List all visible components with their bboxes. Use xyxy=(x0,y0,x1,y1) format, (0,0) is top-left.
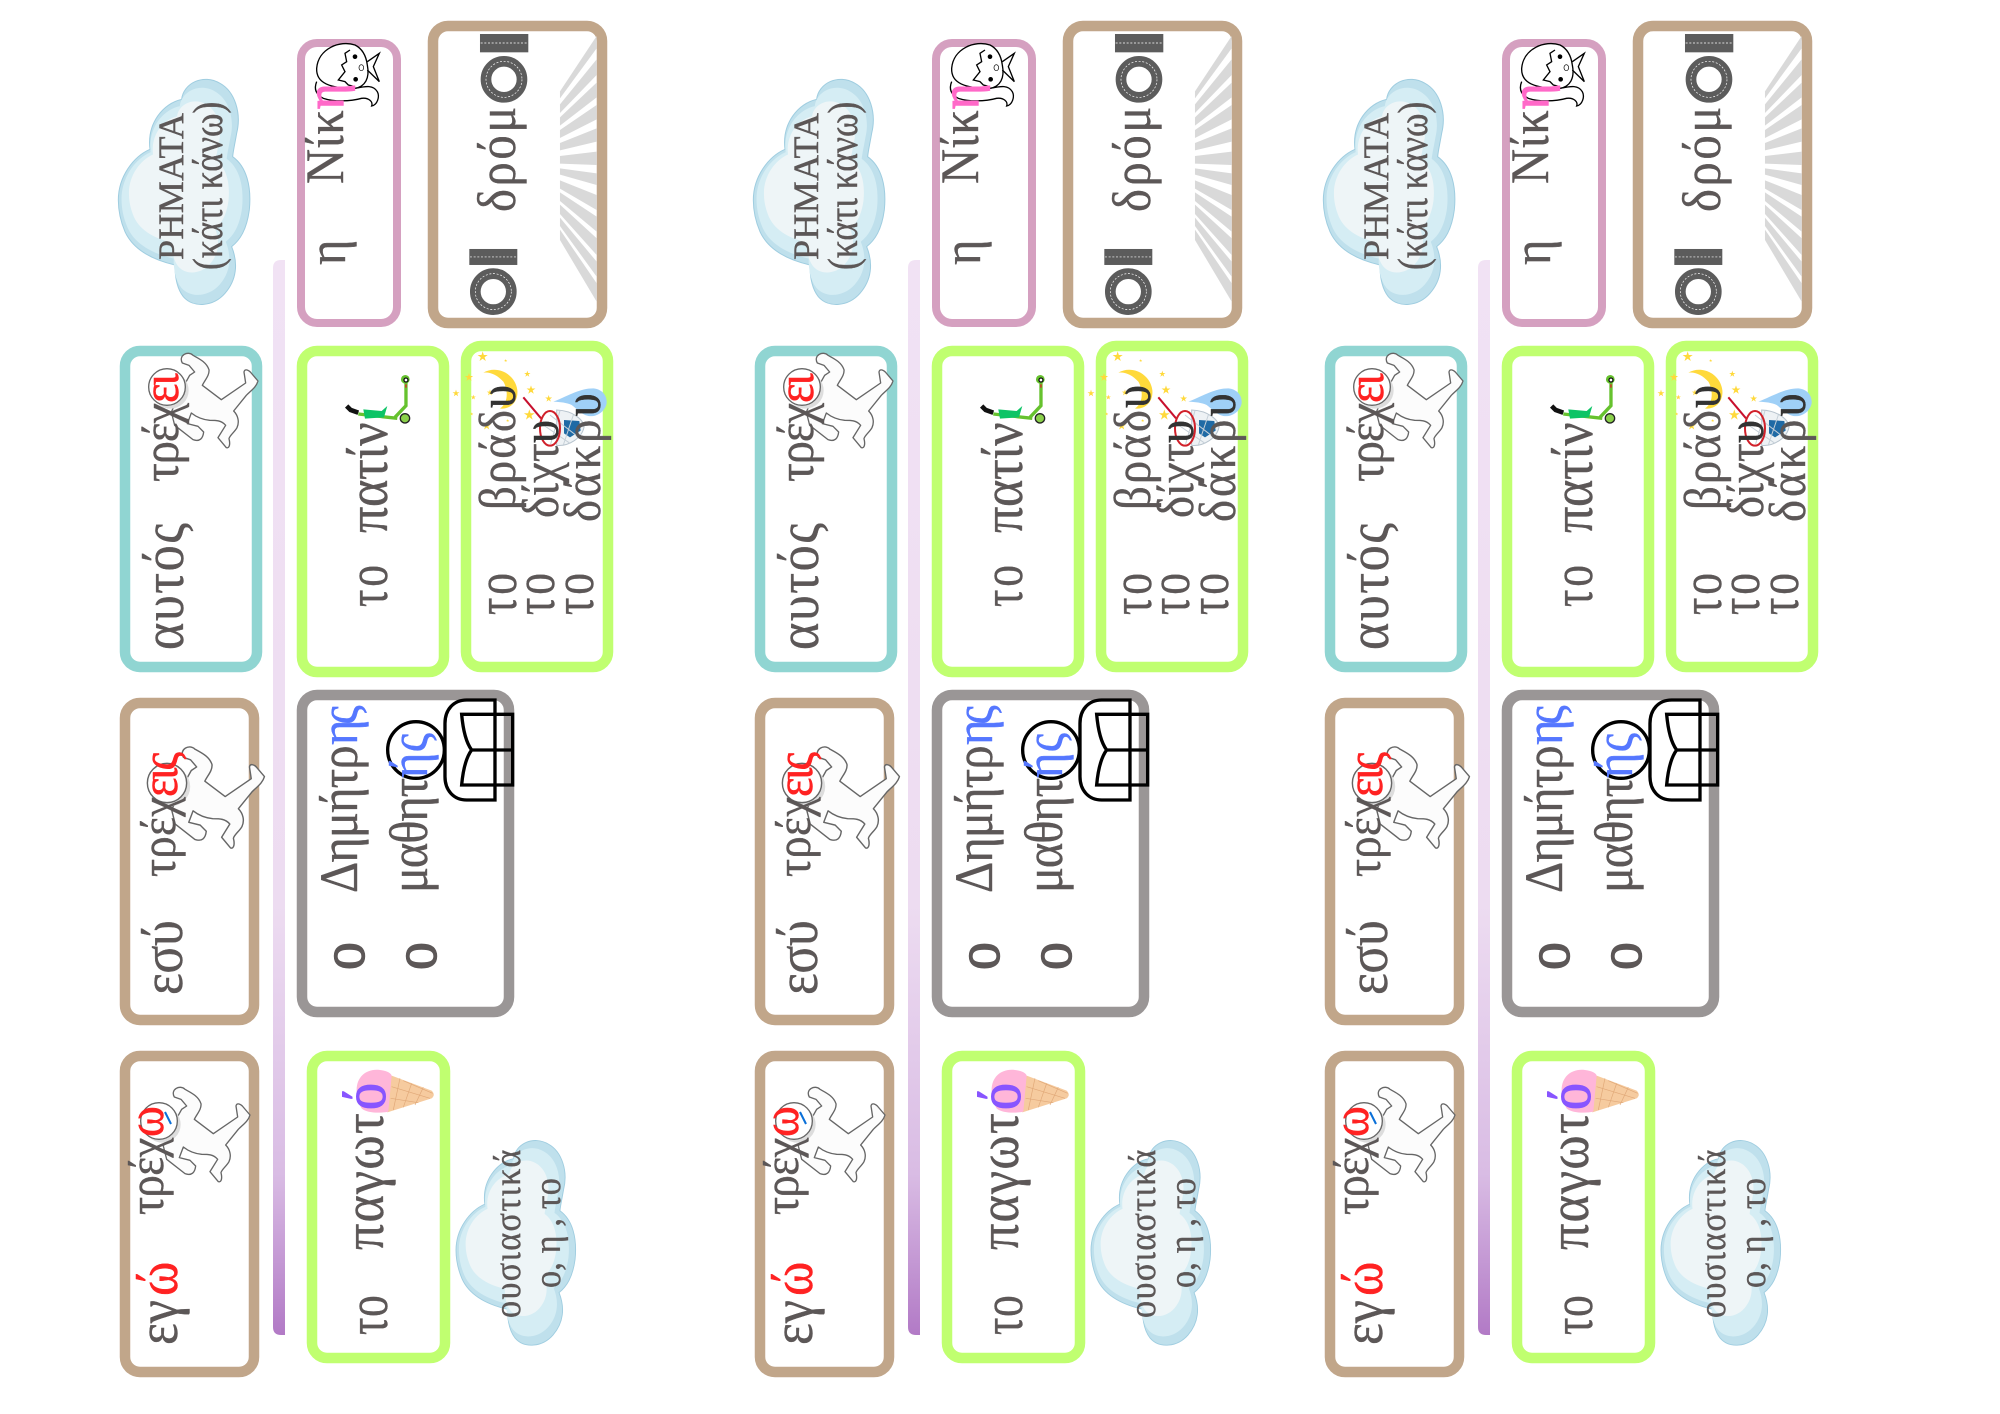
card: η Νίκη: η xyxy=(931,84,991,109)
card: αυτός τρέχει: ει xyxy=(132,373,190,403)
card: το βράδυ, το δίχτυ, το δάκρυ: βράδυ xyxy=(469,385,527,510)
card: το πατίνι: το xyxy=(1541,565,1606,607)
card: αυτός τρέχει: αυτός xyxy=(1336,523,1401,650)
cloud: ουσιαστικά xyxy=(456,1140,576,1345)
card: εσύ τρέχεις xyxy=(125,703,264,1020)
cloud: ουσιαστικά xyxy=(1091,1140,1211,1345)
card: ο Δημήτρης, ο μαθητής: μαθητ xyxy=(1585,778,1645,893)
card: οι δρόμοι xyxy=(433,26,602,323)
card: το βράδυ, το δίχτυ, το δάκρυ: βράδυ xyxy=(1674,385,1732,510)
card: αυτός τρέχει xyxy=(760,351,893,667)
card: ο Δημήτρης, ο μαθητής: Δημήτρ xyxy=(310,745,370,893)
card: το παγωτό: το xyxy=(971,1295,1036,1335)
card: ο Δημήτρης, ο μαθητής: ο xyxy=(1513,942,1583,970)
card: οι δρόμοι xyxy=(1638,26,1807,323)
cloud: ΡΗΜΑΤΑ heading: ΡΗΜΑΤΑ xyxy=(151,113,191,260)
card: εγώ τρέχω: ω xyxy=(752,1106,810,1137)
card: το βράδυ, το δίχτυ, το δάκρυ xyxy=(1658,346,1817,667)
card: το πατίνι: το xyxy=(971,565,1036,607)
card: ο Δημήτρης, ο μαθητής: ής xyxy=(380,733,440,778)
card: το βράδυ, το δίχτυ, το δάκρυ: το xyxy=(1747,573,1812,615)
card: εγώ τρέχω: εγ xyxy=(125,1300,190,1345)
card: το βράδυ, το δίχτυ, το δάκρυ: δίχτυ xyxy=(1717,420,1775,518)
card: εσύ τρέχεις: εις xyxy=(766,752,824,797)
cloud: ουσιαστικά: ουσιαστικά xyxy=(1691,1150,1733,1318)
card: αυτός τρέχει xyxy=(125,351,258,667)
card: οι δρόμοι: δρόμ xyxy=(468,107,528,212)
card: αυτός τρέχει: τρέχ xyxy=(132,403,190,482)
card: το παγωτό: ό xyxy=(332,1083,399,1110)
card: το βράδυ, το δίχτυ, το δάκρυ xyxy=(453,346,612,667)
card: η Νίκη: η xyxy=(1503,240,1563,265)
card: ο Δημήτρης, ο μαθητής: ης xyxy=(310,705,370,745)
card: εγώ τρέχω: ώ xyxy=(1330,1262,1395,1296)
card: το βράδυ, το δίχτυ, το δάκρυ: το xyxy=(1708,573,1773,615)
cloud: ΡΗΜΑΤΑ heading: (κάτι κάνω) xyxy=(820,102,867,270)
card: το βράδυ, το δίχτυ, το δάκρυ: δάκρυ xyxy=(1759,393,1817,522)
cloud: ΡΗΜΑΤΑ heading: (κάτι κάνω) xyxy=(1390,102,1437,270)
card: εσύ τρέχεις xyxy=(760,703,899,1020)
card: το παγωτό: ό xyxy=(967,1083,1034,1110)
card: το βράδυ, το δίχτυ, το δάκρυ xyxy=(1088,346,1247,667)
sheet copy 3 xyxy=(1322,26,1817,1372)
cloud: ουσιαστικά: ο, η , το xyxy=(1161,1178,1203,1288)
card: αυτός τρέχει: τρέχ xyxy=(767,403,825,482)
card: εγώ τρέχω: ω xyxy=(1322,1106,1380,1137)
card: το παγωτό: παγωτ xyxy=(966,1113,1031,1250)
card: το βράδυ, το δίχτυ, το δάκρυ: το xyxy=(1670,573,1735,615)
sheet copy 2 xyxy=(752,26,1247,1372)
cloud: ΡΗΜΑΤΑ heading xyxy=(1323,79,1455,304)
card: αυτός τρέχει: αυτός xyxy=(131,523,196,650)
card: το πατίνι: πατίν xyxy=(970,422,1035,533)
card: το παγωτό xyxy=(947,1056,1080,1358)
divider bar xyxy=(908,260,920,1335)
card: ο Δημήτρης, ο μαθητής: ο xyxy=(380,942,450,970)
cloud: ΡΗΜΑΤΑ heading: ΡΗΜΑΤΑ xyxy=(1356,113,1396,260)
card: εγώ τρέχω: εγ xyxy=(760,1300,825,1345)
card: η Νίκη: Νίκ xyxy=(296,110,356,184)
card: εγώ τρέχω: ω xyxy=(117,1106,175,1137)
divider bar xyxy=(273,260,285,1335)
card: ο Δημήτρης, ο μαθητής: ο xyxy=(1015,942,1085,970)
card: η Νίκη xyxy=(1501,43,1602,323)
card: το βράδυ, το δίχτυ, το δάκρυ: δίχτυ xyxy=(512,420,570,518)
card: αυτός τρέχει: τρέχ xyxy=(1337,403,1395,482)
card: εσύ τρέχεις: εσύ xyxy=(130,920,195,995)
card: εσύ τρέχεις: εσύ xyxy=(765,920,830,995)
sheet copy 1 xyxy=(117,26,612,1372)
card: εγώ τρέχω: ώ xyxy=(125,1262,190,1296)
card: το παγωτό xyxy=(1517,1056,1650,1358)
cloud: ουσιαστικά: ο, η , το xyxy=(526,1178,568,1288)
card: το παγωτό: παγωτ xyxy=(1536,1113,1601,1250)
card: εγώ τρέχω xyxy=(117,1056,254,1372)
cloud: ουσιαστικά: ο, η , το xyxy=(1731,1178,1773,1288)
card: το βράδυ, το δίχτυ, το δάκρυ: το xyxy=(1138,573,1203,615)
card: οι δρόμοι: δρόμ xyxy=(1103,107,1163,212)
card: το πατίνι xyxy=(302,351,444,672)
card: αυτός τρέχει xyxy=(1330,351,1463,667)
card: το παγωτό: ό xyxy=(1537,1083,1604,1110)
card: εσύ τρέχεις: εις xyxy=(1336,752,1394,797)
card: οι δρόμοι: δρόμ xyxy=(1673,107,1733,212)
card: εσύ τρέχεις: εσύ xyxy=(1335,920,1400,995)
card: το βράδυ, το δίχτυ, το δάκρυ: το xyxy=(542,573,607,615)
card: εσύ τρέχεις xyxy=(1330,703,1469,1020)
card: ο Δημήτρης, ο μαθητής xyxy=(937,695,1148,1012)
card: εγώ τρέχω: τρέχ xyxy=(755,1138,810,1215)
card: ο Δημήτρης, ο μαθητής: ης xyxy=(945,705,1005,745)
card: οι δρόμοι xyxy=(1068,26,1237,323)
card: η Νίκη: η xyxy=(933,240,993,265)
card: εγώ τρέχω: εγ xyxy=(1330,1300,1395,1345)
card: εγώ τρέχω xyxy=(752,1056,889,1372)
card: η Νίκη: η xyxy=(1501,84,1561,109)
card: ο Δημήτρης, ο μαθητής: μαθητ xyxy=(1015,778,1075,893)
card: η Νίκη: Νίκ xyxy=(1501,110,1561,184)
card: το πατίνι: πατίν xyxy=(335,422,400,533)
card: το πατίνι: πατίν xyxy=(1540,422,1605,533)
cloud: ΡΗΜΑΤΑ heading: (κάτι κάνω) xyxy=(185,102,232,270)
cloud: ΡΗΜΑΤΑ heading xyxy=(118,79,250,304)
card: το παγωτό: το xyxy=(1541,1295,1606,1335)
card: ο Δημήτρης, ο μαθητής xyxy=(302,695,513,1012)
card: το βράδυ, το δίχτυ, το δάκρυ: δάκρυ xyxy=(1189,393,1247,522)
card: αυτός τρέχει: αυτός xyxy=(766,523,831,650)
card: η Νίκη xyxy=(931,43,1032,323)
cloud: ΡΗΜΑΤΑ heading xyxy=(753,79,885,304)
card: εγώ τρέχω: τρέχ xyxy=(120,1138,175,1215)
card: εσύ τρέχεις: εις xyxy=(131,752,189,797)
card: η Νίκη: η xyxy=(296,84,356,109)
card: ο Δημήτρης, ο μαθητής: μαθητ xyxy=(380,778,440,893)
card: ο Δημήτρης, ο μαθητής: ο xyxy=(943,942,1013,970)
divider bar xyxy=(1478,260,1490,1335)
card: εγώ τρέχω xyxy=(1322,1056,1459,1372)
card: ο Δημήτρης, ο μαθητής: ής xyxy=(1015,733,1075,778)
card: το βράδυ, το δίχτυ, το δάκρυ: βράδυ xyxy=(1104,385,1162,510)
card: εσύ τρέχεις: τρέχ xyxy=(132,797,187,877)
card: το βράδυ, το δίχτυ, το δάκρυ: το xyxy=(1100,573,1165,615)
card: το βράδυ, το δίχτυ, το δάκρυ: δάκρυ xyxy=(554,393,612,522)
card: ο Δημήτρης, ο μαθητής: ο xyxy=(1585,942,1655,970)
card: εγώ τρέχω: ώ xyxy=(760,1262,825,1296)
cloud: ΡΗΜΑΤΑ heading: ΡΗΜΑΤΑ xyxy=(786,113,826,260)
card: εγώ τρέχω: τρέχ xyxy=(1325,1138,1380,1215)
card: ο Δημήτρης, ο μαθητής: ο xyxy=(308,942,378,970)
card: το βράδυ, το δίχτυ, το δάκρυ: το xyxy=(465,573,530,615)
card: ο Δημήτρης, ο μαθητής: Δημήτρ xyxy=(945,745,1005,893)
card: αυτός τρέχει: ει xyxy=(767,373,825,403)
card: ο Δημήτρης, ο μαθητής: ής xyxy=(1585,733,1645,778)
card: η Νίκη: η xyxy=(298,240,358,265)
card: το βράδυ, το δίχτυ, το δάκρυ: το xyxy=(503,573,568,615)
card: το παγωτό: παγωτ xyxy=(331,1113,396,1250)
card: εσύ τρέχεις: τρέχ xyxy=(1337,797,1392,877)
card: το πατίνι: το xyxy=(336,565,401,607)
card: αυτός τρέχει: ει xyxy=(1337,373,1395,403)
card: το παγωτό xyxy=(312,1056,445,1358)
card: το βράδυ, το δίχτυ, το δάκρυ: το xyxy=(1177,573,1242,615)
card: η Νίκη xyxy=(296,43,397,323)
card: το βράδυ, το δίχτυ, το δάκρυ: δίχτυ xyxy=(1147,420,1205,518)
card: το πατίνι xyxy=(937,351,1079,672)
card: ο Δημήτρης, ο μαθητής: Δημήτρ xyxy=(1515,745,1575,893)
cloud: ουσιαστικά xyxy=(1661,1140,1781,1345)
card: το πατίνι xyxy=(1507,351,1649,672)
card: το παγωτό: το xyxy=(336,1295,401,1335)
cloud: ουσιαστικά: ουσιαστικά xyxy=(1121,1150,1163,1318)
card: ο Δημήτρης, ο μαθητής xyxy=(1507,695,1718,1012)
card: ο Δημήτρης, ο μαθητής: ης xyxy=(1515,705,1575,745)
card: εσύ τρέχεις: τρέχ xyxy=(767,797,822,877)
cloud: ουσιαστικά: ουσιαστικά xyxy=(486,1150,528,1318)
card: η Νίκη: Νίκ xyxy=(931,110,991,184)
